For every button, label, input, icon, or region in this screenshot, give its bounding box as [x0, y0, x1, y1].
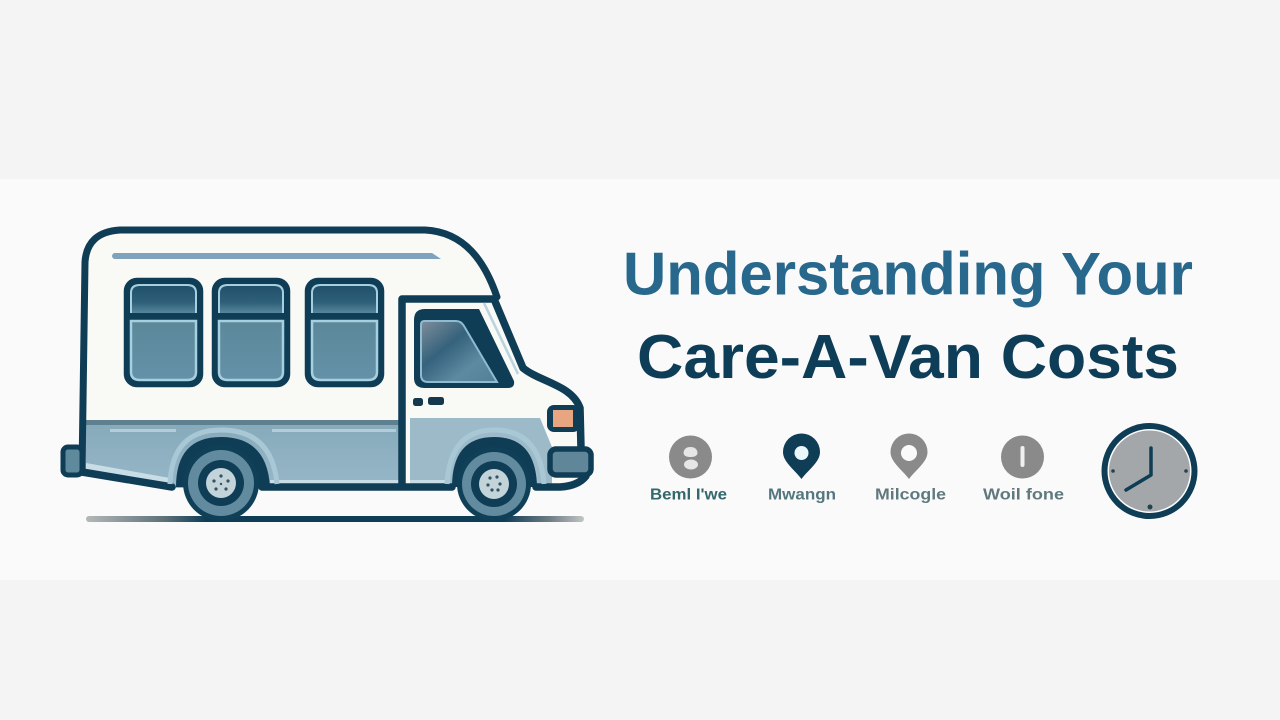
item: mileage pin: Mwangn: [768, 486, 836, 504]
rear bumper: [63, 447, 82, 475]
lower body panel: [82, 418, 552, 488]
front bumper: [550, 449, 591, 475]
item: location pin: Milcogle: [875, 486, 946, 504]
van outline: [82, 230, 497, 472]
ground shadow: [86, 516, 584, 522]
door handles: [413, 397, 444, 406]
icon row: [650, 426, 1194, 516]
title line one: Understanding Your: [623, 240, 1193, 308]
icon: clock: [1104, 426, 1194, 516]
item: first cost: Beml I'we: [650, 486, 727, 504]
cab outline: [82, 299, 586, 487]
illustration: care van: [63, 230, 591, 522]
rear window: [126, 281, 201, 384]
front wheel: [447, 430, 544, 521]
item: wait time: Woil fone: [983, 486, 1064, 504]
roof stripe: [112, 253, 441, 259]
front passenger window: [307, 281, 382, 384]
headlight: [547, 405, 580, 432]
van body fill: [82, 230, 582, 488]
item: location pin: [875, 434, 946, 504]
cab window: [414, 303, 518, 388]
item: wait time: [983, 436, 1064, 504]
rear wheel: [170, 430, 277, 521]
title: [623, 240, 1193, 392]
item: mileage pin: [768, 434, 836, 504]
middle window: [214, 281, 288, 384]
item: first cost: [650, 436, 727, 504]
background band: [0, 179, 1280, 580]
title line two: Care-A-Van Costs: [637, 323, 1179, 392]
